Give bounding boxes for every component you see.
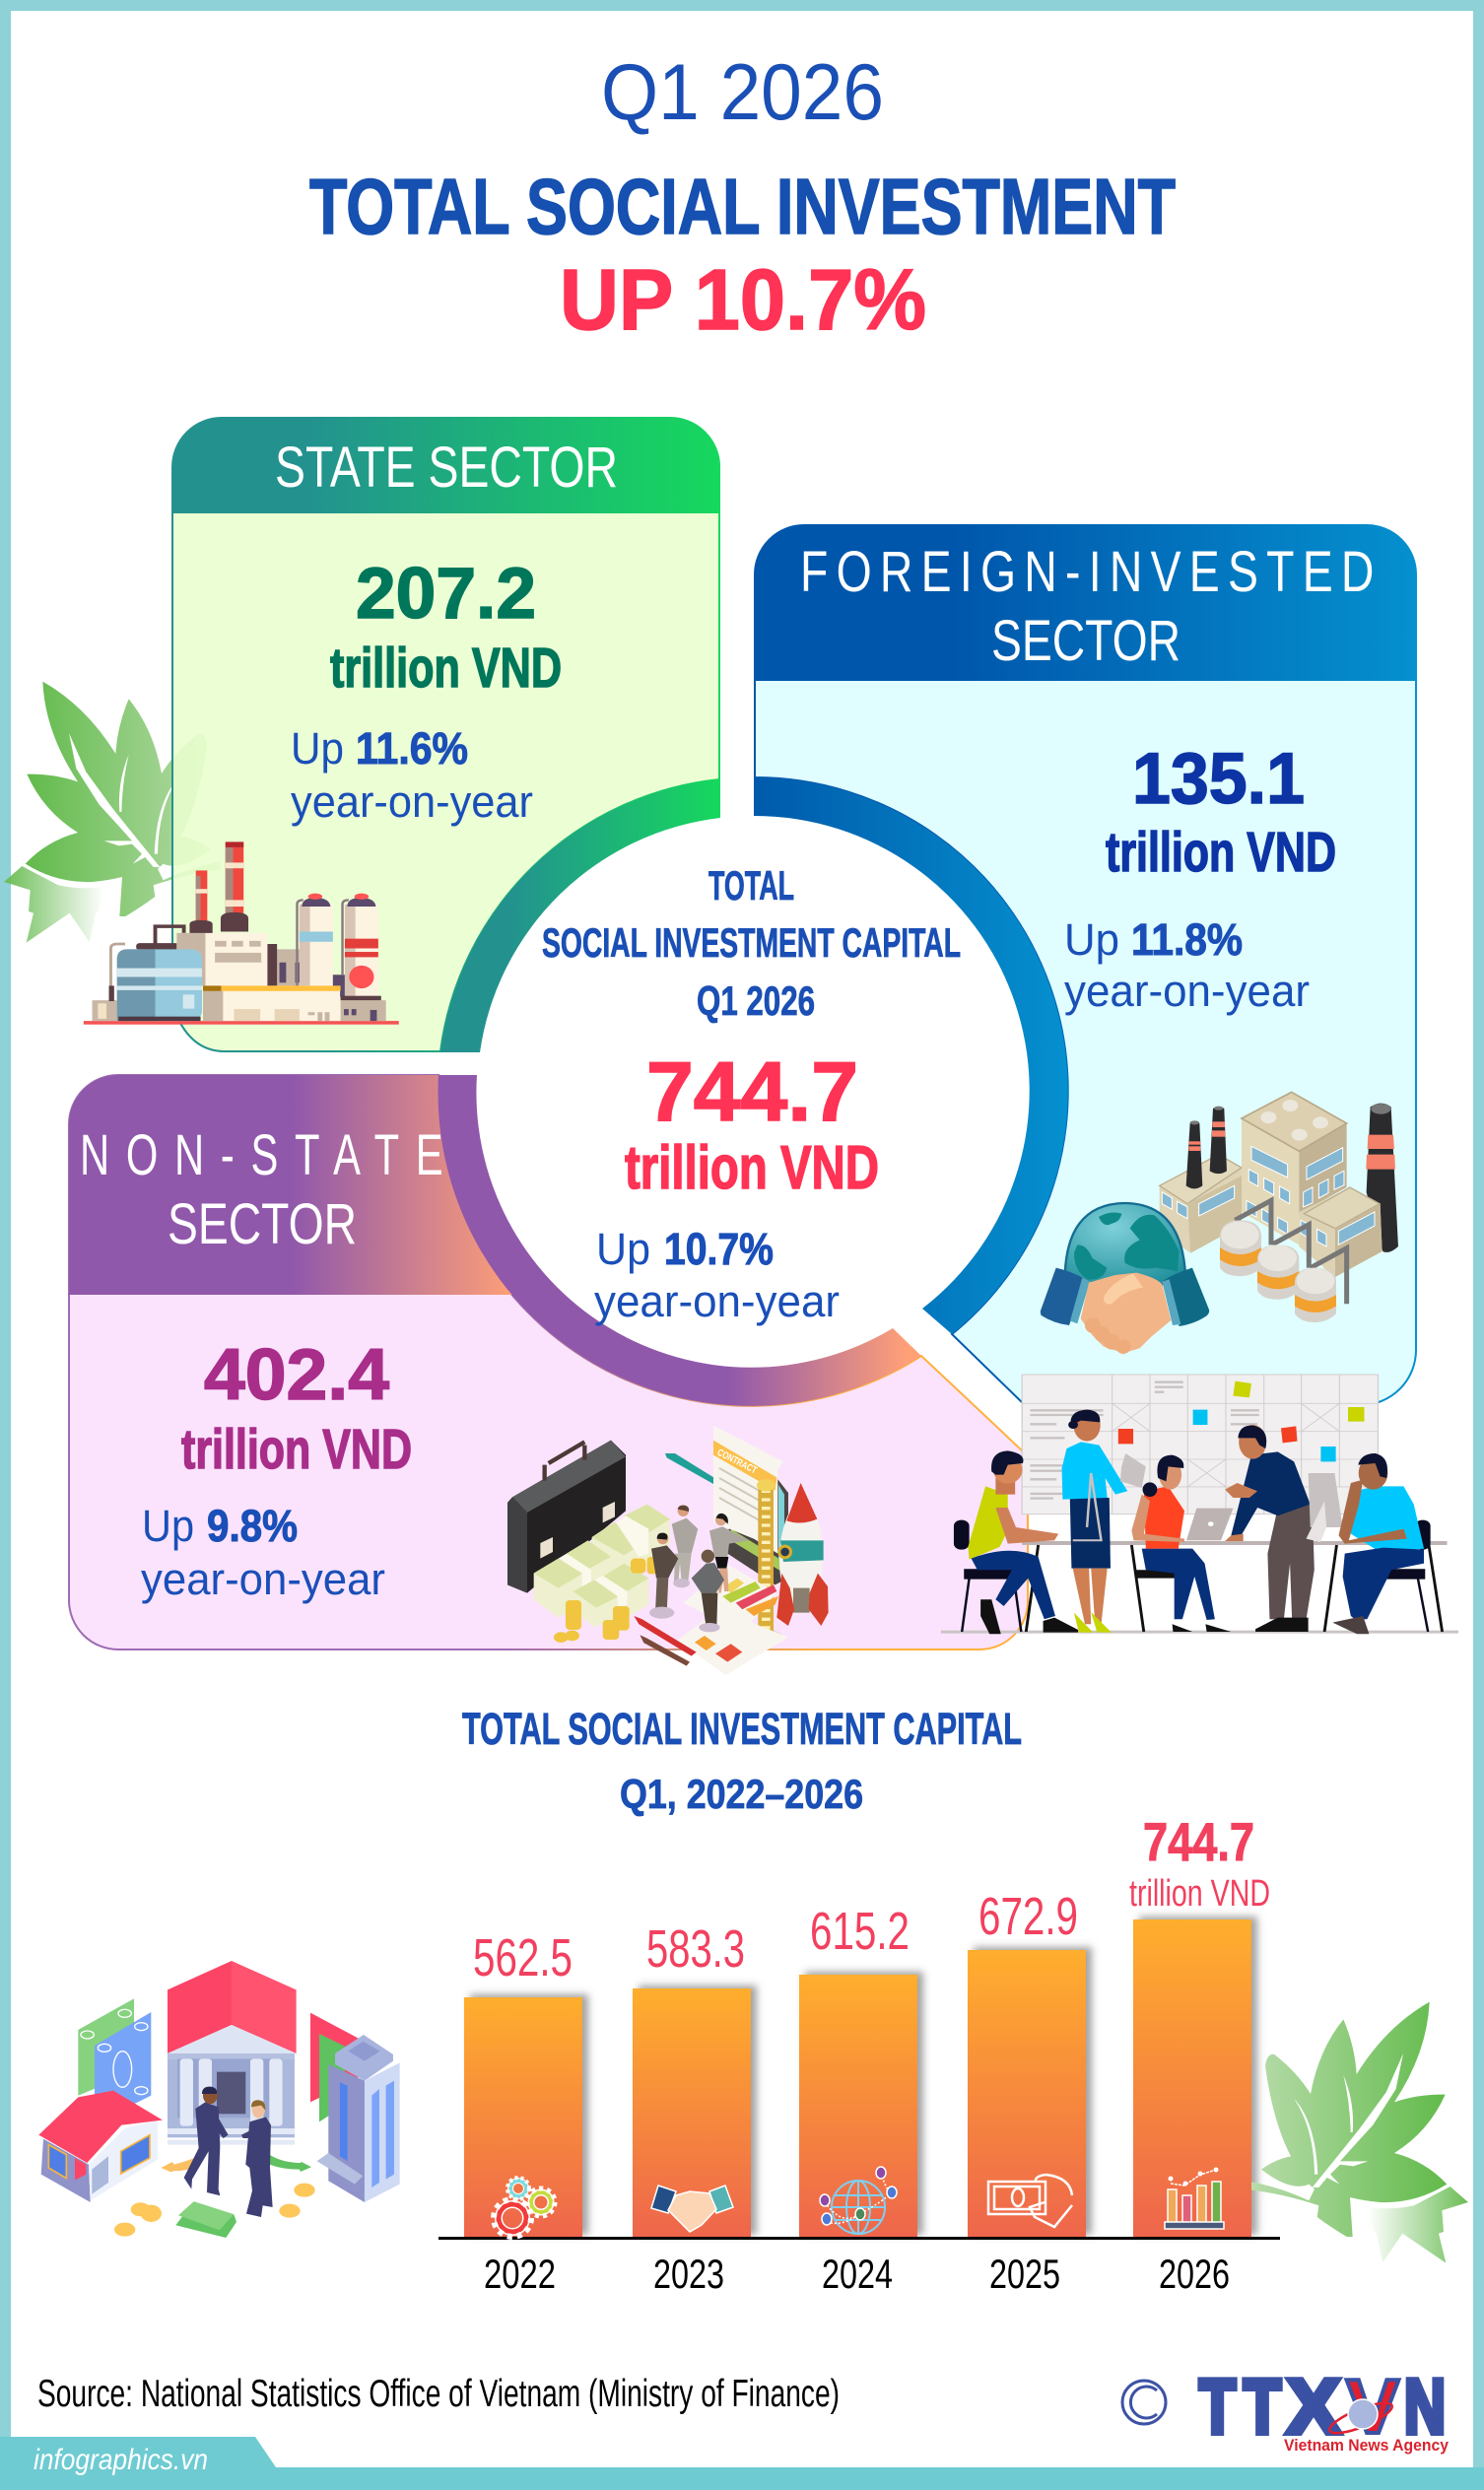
- chart heading: [462, 1704, 1022, 1817]
- center heading: [542, 862, 961, 1024]
- icon: globe, handshake and industrial complex: [1041, 1092, 1398, 1354]
- year labels: [484, 2251, 1230, 2297]
- center text: total capital: [542, 862, 961, 1326]
- non-state growth: year-on-year: [141, 1554, 385, 1604]
- foreign unit: trillion VND: [1106, 821, 1336, 884]
- icon: banknote in hand: [988, 2175, 1072, 2227]
- year labels: 2024: [822, 2251, 893, 2297]
- whiteboard: [1022, 1375, 1378, 1514]
- office tower: [317, 2035, 400, 2202]
- foreign arc: [754, 777, 1068, 1334]
- contract: CONTRACT: [715, 1447, 759, 1476]
- tablet: [727, 1478, 788, 1584]
- briefcase: [507, 1441, 626, 1593]
- center value: 744.7: [646, 1045, 858, 1139]
- logo: TTXVN: N: [1404, 2363, 1446, 2450]
- rocket: [776, 1483, 829, 1626]
- icon: briefcase, money, contract and rocket: [507, 1426, 829, 1675]
- state arc: [440, 779, 720, 1052]
- state unit: trillion VND: [330, 637, 562, 700]
- non-state heading: [80, 1122, 443, 1256]
- state panel header: [172, 418, 720, 513]
- state panel body: [172, 418, 719, 1051]
- small chimneys: [1186, 1107, 1227, 1188]
- person 2 standing: [1062, 1410, 1146, 1633]
- non-state unit: trillion VND: [181, 1418, 412, 1481]
- person 5 seated: [1332, 1453, 1431, 1634]
- footer band: [0, 2437, 1484, 2490]
- foreign panel body: [755, 525, 1416, 1405]
- floor: [941, 1631, 1458, 1634]
- foreign growth: Up: [1064, 914, 1119, 965]
- center unit: trillion VND: [625, 1134, 879, 1202]
- chart ring: central circle with three sector arcs: [438, 777, 1068, 1406]
- value labels: [473, 1887, 1078, 1987]
- icon: factory: [84, 841, 399, 1025]
- non-state growth: 9.8%: [207, 1501, 298, 1551]
- state heading: STATE SECTOR: [275, 436, 618, 500]
- person 3 seated: [1131, 1455, 1233, 1632]
- title: UP 10.7%: [560, 252, 926, 348]
- foreign heading: FOREIGN-INVESTED: [800, 540, 1374, 604]
- non-state panel body: [69, 1075, 1028, 1649]
- chart heading: TOTAL SOCIAL INVESTMENT CAPITAL: [462, 1704, 1022, 1754]
- state growth: [291, 723, 533, 827]
- center heading: SOCIAL INVESTMENT CAPITAL: [542, 919, 961, 966]
- axis: [438, 2237, 1280, 2240]
- logo: TTXVN: [1199, 2363, 1449, 2455]
- icon: bar chart with trend: [1165, 2168, 1224, 2229]
- icon: network globe: [820, 2167, 897, 2234]
- year labels: 2025: [989, 2251, 1060, 2297]
- icon: handshake: [651, 2186, 733, 2232]
- bank building: [168, 1961, 297, 2145]
- low right building: [1299, 1187, 1383, 1277]
- logo: TTXVN: T: [1244, 2363, 1281, 2450]
- foreign growth: [1064, 914, 1310, 1016]
- crane tower: [750, 1479, 781, 1644]
- money bundle: [175, 2201, 236, 2238]
- non-state growth: Up: [142, 1501, 194, 1551]
- copyright mark: [1122, 2381, 1166, 2424]
- decoration: left leaf: [4, 682, 221, 943]
- icon: gears: [494, 2178, 555, 2237]
- foreign heading: [800, 540, 1374, 673]
- ground sheets: [677, 1565, 788, 1675]
- panel: state sector: [172, 418, 720, 1051]
- coins: [114, 2184, 315, 2237]
- banknotes left: [78, 1998, 151, 2125]
- foreign growth: 11.8%: [1131, 914, 1243, 965]
- highlighted value: 744.7: [1143, 1811, 1254, 1872]
- non-state arc: [438, 1075, 921, 1406]
- title: Q1 2026: [601, 48, 884, 137]
- bars: [464, 1919, 1251, 2238]
- tanks: [1220, 1220, 1336, 1322]
- year labels: 2026: [1159, 2251, 1230, 2297]
- non-state heading: SECTOR: [168, 1192, 357, 1256]
- foreign panel header: [755, 525, 1416, 681]
- foreign value: 135.1: [1132, 739, 1305, 819]
- foreign heading: SECTOR: [991, 609, 1180, 673]
- foreign growth: year-on-year: [1064, 966, 1310, 1016]
- pen: [665, 1453, 722, 1487]
- year labels: 2023: [653, 2251, 724, 2297]
- bar chart: [438, 1811, 1280, 2297]
- value labels: 562.5: [473, 1928, 573, 1987]
- title: [309, 48, 1176, 348]
- coin stacks: [554, 1557, 657, 1643]
- non-state heading: NON-STATE: [80, 1122, 443, 1187]
- value labels: 615.2: [810, 1902, 910, 1961]
- money stacks: [534, 1505, 670, 1628]
- value labels: 583.3: [646, 1919, 745, 1979]
- house: [38, 2091, 163, 2202]
- tall chimney: [1366, 1104, 1398, 1252]
- logo: TTXVN: X: [1287, 2363, 1340, 2450]
- non-state value: 402.4: [204, 1335, 389, 1415]
- arrows: [161, 2155, 311, 2172]
- non-state panel header: [69, 1075, 516, 1295]
- globe: [1065, 1203, 1185, 1284]
- center growth: year-on-year: [594, 1276, 840, 1326]
- table: [1022, 1541, 1448, 1632]
- illustration: meeting team and whiteboard: [941, 1375, 1458, 1634]
- handshake: [1041, 1268, 1209, 1354]
- banknotes right: [310, 2013, 358, 2121]
- non-state growth: [141, 1501, 385, 1604]
- source note: Source: National Statistics Office of Vietnam (Ministry of Finance): [37, 2373, 840, 2415]
- contract: [713, 1426, 783, 1554]
- person 1 seated: [954, 1450, 1078, 1634]
- center growth: [594, 1224, 840, 1326]
- businessmen: [184, 2087, 273, 2217]
- logo tagline: Vietnam News Agency: [1284, 2436, 1449, 2455]
- logo: TTXVN: V: [1346, 2363, 1399, 2450]
- business people: [649, 1506, 749, 1632]
- illustration: bank, house and handshake: [38, 1961, 400, 2238]
- title: TOTAL SOCIAL INVESTMENT: [309, 163, 1176, 250]
- chart heading: Q1, 2022–2026: [620, 1771, 863, 1817]
- center growth: 10.7%: [664, 1224, 774, 1274]
- center heading: TOTAL: [708, 862, 794, 909]
- footer site name: infographics.vn: [34, 2444, 208, 2476]
- state growth: Up: [291, 723, 344, 774]
- main tower: [1242, 1092, 1347, 1245]
- red pencils: [634, 1616, 697, 1666]
- panel: non-state sector: [69, 1075, 1028, 1649]
- person 4 standing: [1225, 1425, 1315, 1632]
- decoration: right leaf: [1251, 2002, 1468, 2263]
- center growth: Up: [596, 1224, 650, 1274]
- state growth: 11.6%: [356, 723, 468, 774]
- state value: 207.2: [356, 554, 536, 634]
- year labels: 2022: [484, 2251, 556, 2297]
- panel: foreign-invested sector: [755, 525, 1416, 1405]
- monitor: [1307, 1473, 1343, 1542]
- low left building: [1160, 1155, 1242, 1253]
- unit label: trillion VND: [1129, 1873, 1270, 1915]
- logo: TTXVN: T: [1199, 2363, 1236, 2450]
- center heading: Q1 2026: [697, 977, 815, 1024]
- state growth: year-on-year: [291, 776, 533, 827]
- value labels: 672.9: [978, 1887, 1078, 1946]
- pipes: [1235, 1200, 1347, 1304]
